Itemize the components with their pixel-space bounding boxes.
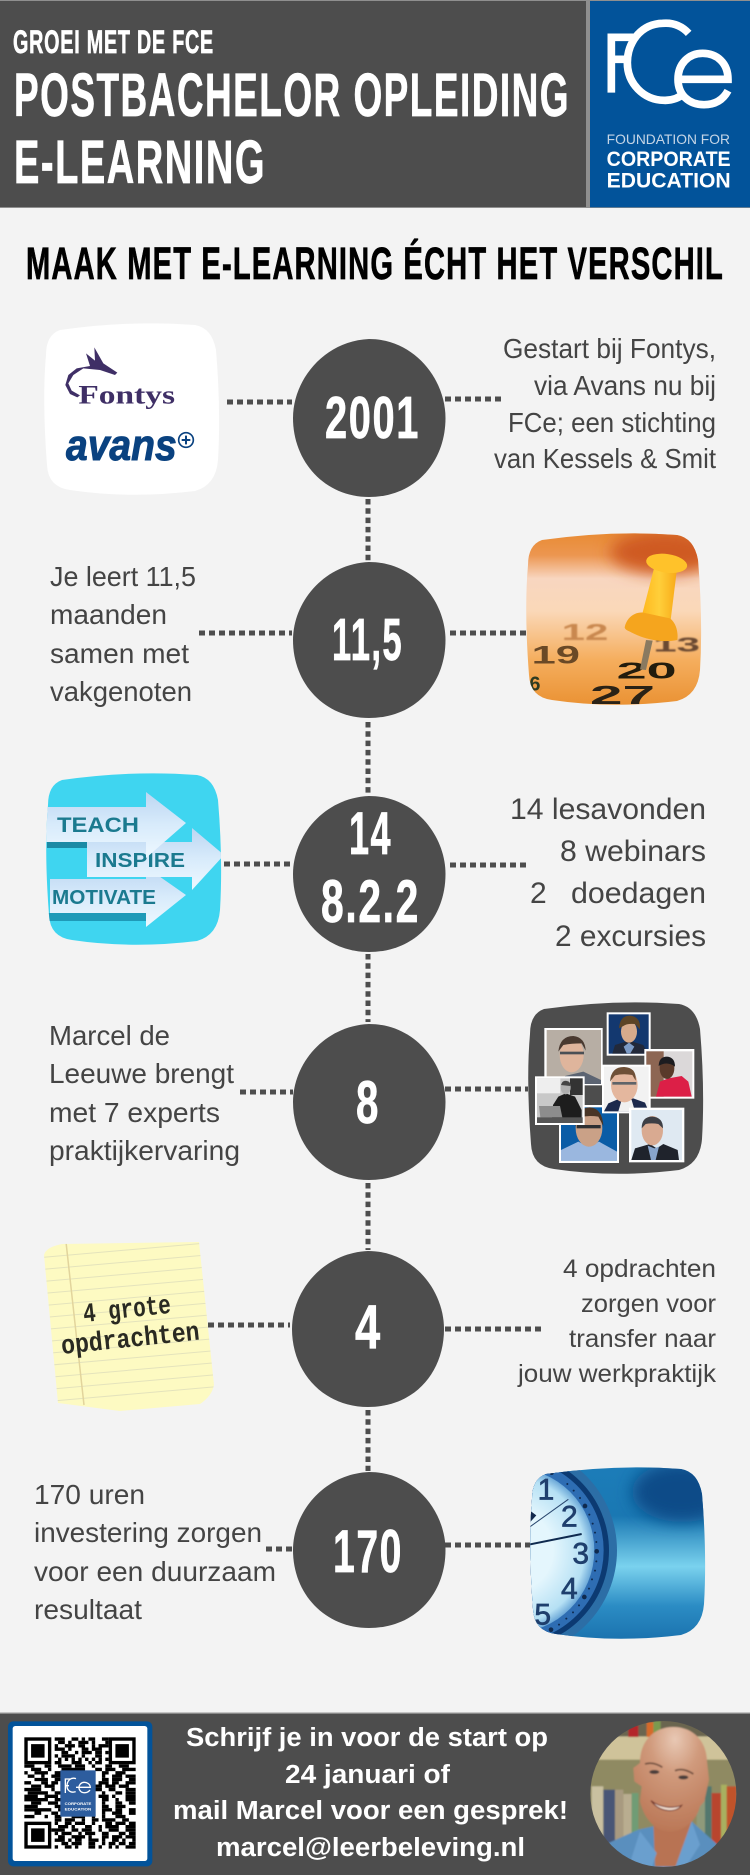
portrait frame 4	[559, 1105, 619, 1163]
connector left	[199, 630, 292, 636]
description	[49, 1020, 240, 1166]
number circle: 8.2.2	[321, 868, 420, 935]
number circle	[293, 1472, 446, 1628]
number circle: 14	[349, 800, 392, 867]
description: resultaat	[34, 1594, 142, 1625]
clock numerals: 4	[561, 1573, 578, 1606]
row 4: 8	[49, 1002, 703, 1180]
description	[510, 793, 706, 953]
QR code card	[8, 1721, 152, 1866]
QR centre logo: CORPORATE	[65, 1802, 92, 1806]
description: Je leert 11,5	[50, 561, 196, 592]
portrait frame 5	[535, 1076, 585, 1125]
description: Gestart bij Fontys,	[503, 333, 716, 364]
QR modules	[24, 1739, 136, 1847]
description: 14 lesavonden	[510, 793, 706, 826]
row 3: 14 8.2.2	[40, 770, 706, 953]
logo wordmark: FOUNDATION FOR	[607, 131, 730, 147]
number circle	[293, 339, 446, 497]
description: Leeuwe brengt	[49, 1058, 234, 1089]
logo mark	[611, 23, 728, 105]
header kicker: GROEI MET DE FCE	[13, 24, 214, 60]
description: zorgen voor	[581, 1290, 716, 1318]
calendar numbers: 12	[562, 619, 608, 645]
portrait frame 3	[644, 1049, 694, 1099]
image: teach inspire motivate arrows	[46, 773, 222, 945]
calendar numbers: 19	[532, 641, 580, 669]
description: investering zorgen	[34, 1517, 262, 1548]
description	[34, 1479, 276, 1625]
description: 170 uren	[34, 1479, 145, 1510]
description: 2	[530, 877, 547, 910]
connector left	[266, 1546, 292, 1552]
header band	[0, 0, 750, 208]
number circle: 2001	[325, 385, 420, 451]
call to action text: marcel@leerbeleving.nl	[216, 1834, 525, 1862]
connector left	[227, 400, 292, 404]
arrow: inspire	[87, 828, 224, 890]
logos card: Fontys and Avans: Fontys	[78, 379, 175, 409]
push pin	[625, 551, 688, 670]
connector left	[224, 862, 294, 866]
description	[494, 333, 716, 474]
number circle: 170	[333, 1518, 403, 1585]
number circle	[293, 796, 446, 952]
row 1: 2001	[44, 323, 716, 497]
clock numerals: 2	[561, 1501, 578, 1534]
description: doedagen	[571, 877, 706, 910]
QR centre logo: EDUCATION	[65, 1807, 92, 1811]
logo wordmark: CORPORATE	[607, 147, 731, 171]
number circle	[293, 1024, 446, 1180]
description: FCe; een stichting	[508, 407, 716, 438]
connector right	[445, 1086, 528, 1092]
clock hands	[530, 1499, 569, 1527]
logo wordmark: EDUCATION	[607, 169, 731, 193]
logos card: Fontys and Avans: avans	[66, 421, 177, 470]
number circle: 8	[356, 1069, 380, 1136]
timeline vertical connectors	[366, 499, 370, 1471]
description: 4 opdrachten	[563, 1255, 716, 1283]
calendar numbers: 27	[590, 680, 655, 710]
number circle	[293, 562, 446, 718]
portrait of Marcel	[590, 1721, 736, 1867]
image: yellow note with text	[44, 1242, 214, 1411]
description: met 7 experts	[49, 1097, 220, 1128]
arrow: inspire: INSPIRE	[95, 850, 185, 872]
description	[50, 561, 196, 707]
row 6: 170	[34, 1467, 706, 1639]
arrow: motivate: MOTIVATE	[52, 887, 156, 909]
row 5: 4	[14, 1238, 717, 1414]
call to action text	[173, 1724, 568, 1862]
main title line 2: E-LEARNING	[14, 128, 266, 196]
clock numerals: 1	[538, 1473, 554, 1506]
image: expert portraits	[528, 1002, 703, 1174]
image: yellow note with text: 4 grote	[82, 1292, 172, 1331]
clock numerals: 3	[572, 1538, 589, 1571]
call to action text: 24 januari of	[285, 1761, 451, 1789]
description: via Avans nu bij	[534, 370, 716, 401]
arrow: teach: TEACH	[57, 814, 139, 837]
call to action text: mail Marcel voor een gesprek!	[173, 1797, 568, 1825]
image: clock	[530, 1467, 706, 1639]
call to action text: Schrijf je in voor de start op	[186, 1724, 548, 1752]
connector right	[445, 1326, 543, 1332]
description: jouw werkpraktijk	[517, 1360, 717, 1388]
connector right	[450, 630, 530, 636]
portrait frame 2	[607, 1012, 651, 1056]
portrait frame 1	[544, 1028, 603, 1085]
number circle: 4	[355, 1293, 382, 1362]
description: van Kessels & Smit	[494, 443, 716, 474]
clock hour dots	[549, 1471, 599, 1632]
description: Marcel de	[49, 1020, 170, 1051]
description: 8 webinars	[560, 835, 706, 868]
QR centre logo	[60, 1770, 96, 1817]
connector right	[445, 396, 503, 402]
calendar numbers	[530, 623, 700, 704]
icon: Fontys dragon	[65, 347, 117, 397]
logo wordmark	[607, 131, 731, 193]
footer band	[0, 1712, 750, 1875]
clock numerals	[534, 1473, 589, 1631]
calendar numbers: 20	[617, 657, 677, 683]
description: vakgenoten	[50, 676, 192, 707]
image: calendar with push pin	[526, 533, 702, 705]
image: yellow note with text: opdrachten	[60, 1319, 201, 1363]
description: transfer naar	[569, 1325, 716, 1353]
FCe logo panel	[590, 1, 750, 207]
logos card: Fontys and Avans	[44, 323, 219, 495]
arrow: teach	[40, 792, 186, 858]
number circle	[292, 1251, 444, 1407]
number circle: 11,5	[332, 607, 403, 673]
calendar numbers: 6	[529, 674, 540, 696]
connector right	[445, 1542, 530, 1548]
connector right	[450, 862, 530, 868]
description: maanden	[50, 599, 167, 630]
description	[517, 1255, 717, 1388]
connector left	[208, 1322, 290, 1328]
portrait frame 7	[629, 1108, 684, 1162]
description: praktijkervaring	[49, 1135, 240, 1166]
connector left	[240, 1090, 293, 1094]
description: samen met	[50, 638, 189, 669]
arrow: motivate	[50, 877, 186, 927]
description: 2 excursies	[555, 920, 706, 953]
row 2: 11,5	[50, 530, 720, 718]
portrait frame 6	[602, 1065, 651, 1113]
calendar numbers: 13	[653, 634, 700, 657]
description: voor een duurzaam	[34, 1556, 276, 1587]
clock numerals: 5	[534, 1598, 551, 1631]
